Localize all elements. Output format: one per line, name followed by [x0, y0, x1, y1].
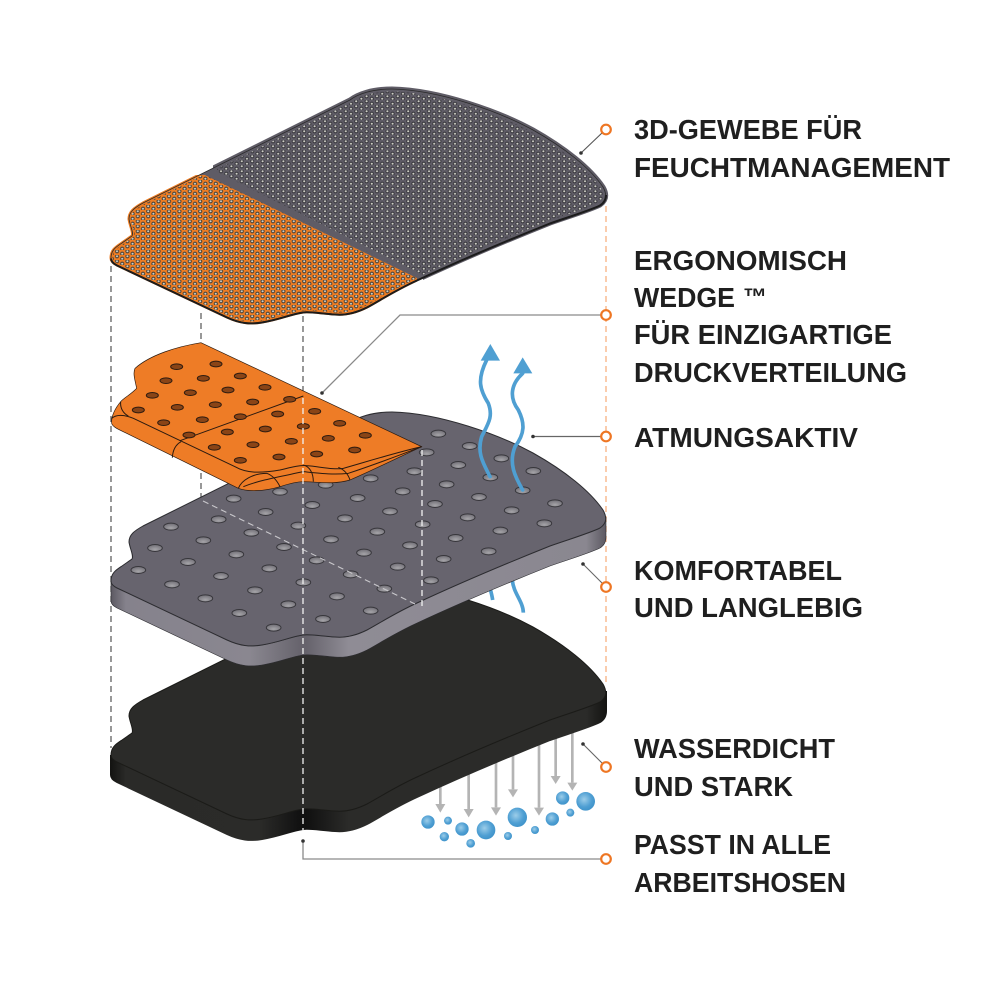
arrow: air tails below the middle layer — [490, 580, 523, 613]
connector: wedge — [320, 310, 611, 395]
text: waterproof: WASSERDICHT — [634, 733, 835, 764]
icon: grey downward arrows — [435, 730, 577, 817]
text: ergonomic wedge: DRUCKVERTEILUNG — [634, 357, 907, 388]
text: comfortable — [634, 555, 863, 623]
text: waterproof — [634, 733, 835, 802]
text: comfortable: KOMFORTABEL — [634, 555, 842, 586]
panel: grey perforated comfort layer — [111, 412, 606, 666]
text: ergonomic wedge: ™ — [743, 284, 767, 311]
panel: orange ergonomic wedge — [112, 343, 422, 491]
connector: fits all trousers — [301, 839, 611, 864]
icon: blue water bubbles — [421, 791, 595, 848]
text: breathable: ATMUNGSAKTIV — [634, 422, 859, 453]
text: 3D fabric: 3D-GEWEBE FÜR — [634, 114, 862, 145]
connector: waterproof — [581, 742, 611, 772]
text: comfortable: UND LANGLEBIG — [634, 592, 863, 623]
text: ergonomic wedge — [634, 245, 907, 388]
seam band — [205, 170, 423, 278]
connector: 3D fabric — [579, 125, 611, 155]
connector: comfort — [581, 562, 611, 592]
panel: 3D fabric top layer — [111, 89, 606, 323]
white guide lines over the layers — [303, 398, 422, 831]
wedge perforation holes — [132, 361, 371, 463]
text: 3D fabric: FEUCHTMANAGEMENT — [634, 152, 950, 183]
wedge fold lines — [112, 396, 422, 488]
text: ergonomic wedge: ERGONOMISCH — [634, 245, 847, 276]
text: waterproof: UND STARK — [634, 771, 793, 802]
grey fabric perforation — [213, 86, 608, 280]
icon: water drops below the waterproof layer — [421, 730, 595, 848]
text: fits all trousers — [634, 829, 846, 898]
panel: black waterproof layer — [111, 586, 606, 840]
guide lines behind layers — [111, 206, 606, 748]
text: fits all trousers: PASST IN ALLE — [634, 829, 831, 860]
text: fits all trousers: ARBEITSHOSEN — [634, 867, 846, 898]
text: ergonomic wedge: FÜR EINZIGARTIGE — [634, 319, 892, 350]
orange fabric perforation — [110, 175, 417, 324]
connector: breathable — [531, 432, 611, 441]
perforation holes — [131, 430, 562, 631]
seam line on the grey layer — [203, 501, 415, 604]
text: ergonomic wedge: WEDGE — [634, 282, 735, 313]
arrow: blue breathability arrows — [480, 344, 532, 490]
text: 3D fabric — [634, 114, 950, 183]
dark front edge — [111, 195, 606, 323]
